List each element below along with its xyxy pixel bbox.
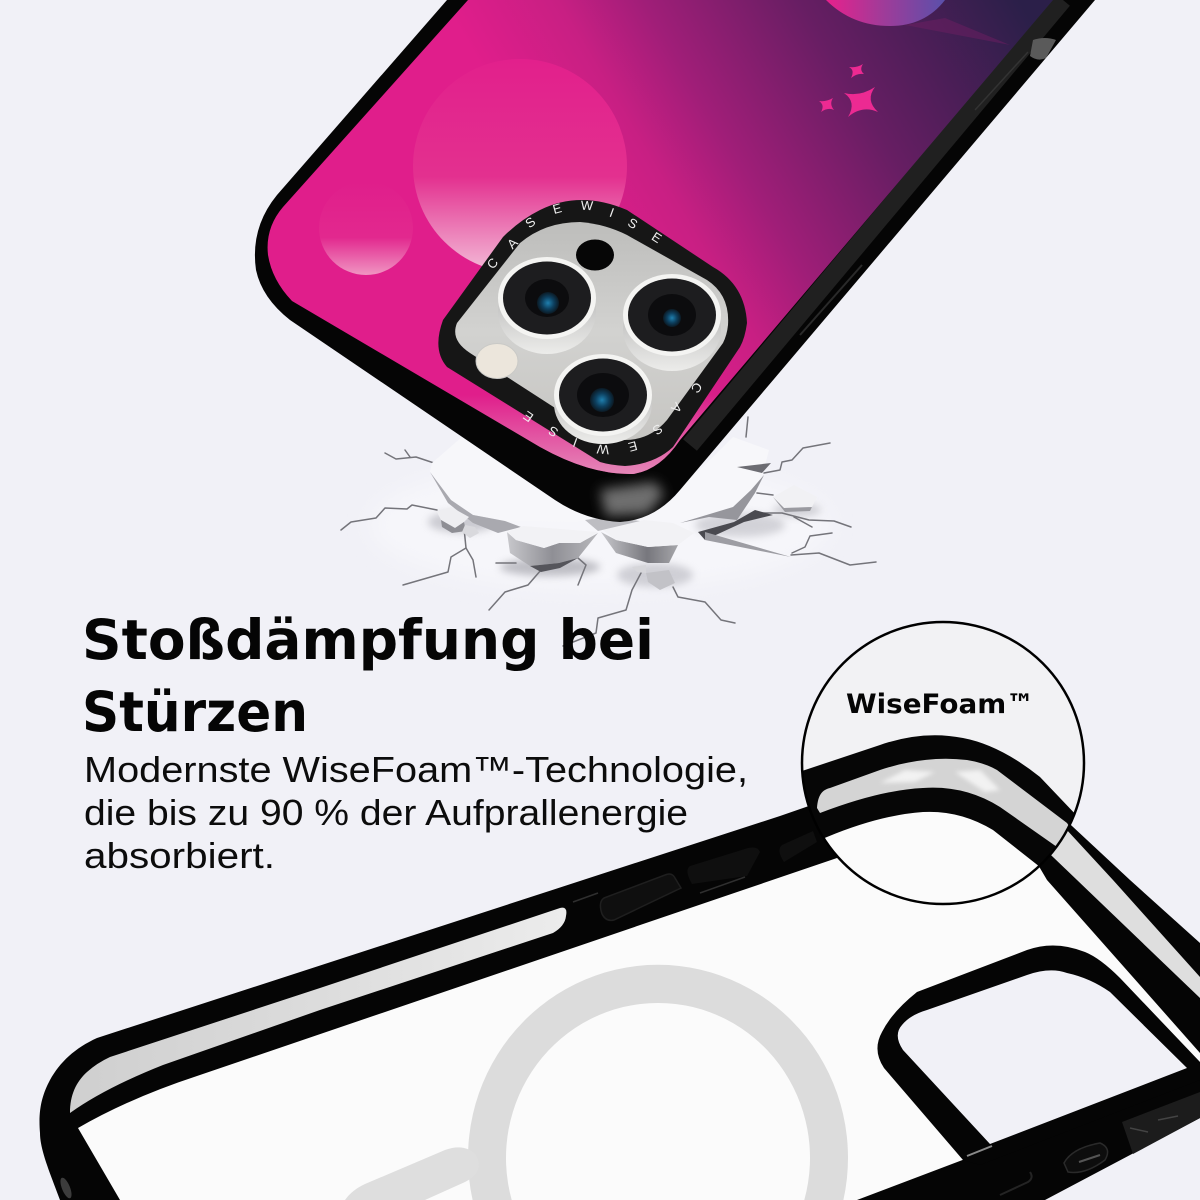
- brand ring text: I: [571, 435, 579, 450]
- body text: die bis zu 90 % der Aufprallenergie: [84, 792, 688, 833]
- lens 1: [498, 257, 596, 354]
- camera cutout: [898, 970, 1187, 1144]
- right plate: [640, 437, 791, 557]
- callout label: WiseFoam™: [846, 689, 1034, 720]
- brand ring text: C: [484, 255, 501, 272]
- left side hole: [58, 1176, 74, 1200]
- brand ring text: S: [650, 421, 666, 438]
- lens 2: [623, 274, 721, 371]
- body text: Modernste WiseFoam™-Technologie,: [84, 749, 748, 790]
- lens 3: [554, 354, 652, 444]
- screen: [268, 0, 1053, 474]
- brand ring text: S: [522, 214, 539, 231]
- clear interior: [78, 800, 1200, 1200]
- phone: case with screen and camera, tilted on impact: [250, 0, 1100, 522]
- brand ring text: E: [551, 200, 564, 217]
- camera island: [438, 198, 747, 466]
- stars: [819, 64, 878, 117]
- frame: [39, 745, 1200, 1200]
- body text: [84, 749, 748, 876]
- body text: absorbiert.: [84, 835, 275, 876]
- magnified interior: [826, 812, 1038, 902]
- title: Stoßdämpfung bei: [82, 608, 654, 672]
- planet shadow: [905, 18, 1010, 45]
- callout: magnified WiseFoam detail: [800, 620, 1086, 906]
- brand ring text: E: [649, 229, 665, 246]
- brand ring text: S: [545, 423, 561, 440]
- brand ring text: C: [688, 379, 705, 396]
- brand ring text: A: [504, 235, 521, 252]
- brand ring text: W: [580, 198, 594, 213]
- title: [82, 608, 654, 744]
- camera cutout frame: [877, 945, 1200, 1165]
- center-left rock chunk: [507, 526, 598, 572]
- small bubble: [320, 227, 413, 275]
- right slot: [1030, 790, 1200, 998]
- magsafe ring: [468, 965, 848, 1200]
- flash: [476, 344, 518, 378]
- side buttons top: [573, 831, 817, 920]
- silver camera plate: [455, 222, 728, 440]
- magsafe alignment pill: [345, 1147, 479, 1200]
- brand ring text: E: [520, 408, 536, 425]
- planet: [826, 0, 945, 26]
- brand ring text: [484, 198, 705, 458]
- magnified foam slot: [817, 758, 1068, 846]
- large bubble: [413, 59, 627, 273]
- small rock fragments: [437, 485, 817, 590]
- clear case with black frame: [39, 745, 1200, 1200]
- brand ring text: A: [668, 400, 685, 416]
- center-right rock chunk: [585, 517, 694, 563]
- brand ring text: W: [596, 441, 610, 458]
- left plate: [430, 430, 620, 533]
- left slot: [70, 908, 566, 1113]
- illustration: cracked ground impact: [341, 417, 876, 646]
- brand ring text: I: [608, 205, 616, 220]
- lens hole: [576, 240, 614, 270]
- bumper: [255, 0, 1095, 522]
- side buttons bottom: [1000, 1092, 1200, 1195]
- brand ring text: E: [626, 438, 639, 455]
- brand ring text: S: [625, 215, 641, 232]
- magnified black frame: [804, 735, 1074, 866]
- title: Stürzen: [82, 680, 308, 744]
